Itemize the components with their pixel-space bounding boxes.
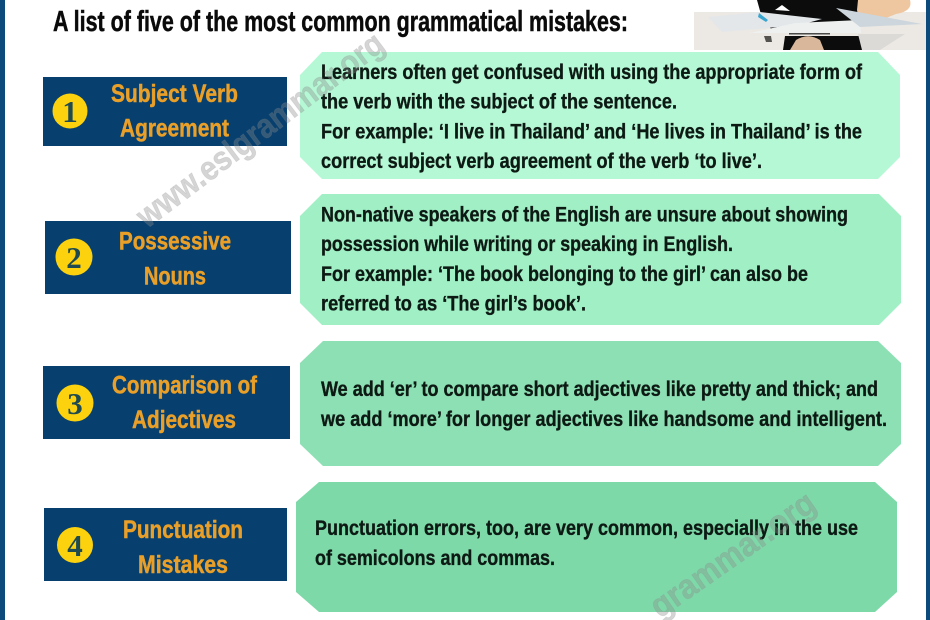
label: comparison of adjectives: Adjectives [132, 406, 236, 434]
photo: student writing at a desk [694, 0, 926, 50]
right border strip [926, 0, 930, 620]
label: possessive nouns: Nouns [144, 262, 206, 290]
title: A list of five of the most common grammatical mistakes: [53, 6, 628, 38]
panel: mistake 1 description [300, 52, 900, 179]
panel: mistake 4 description: Punctuation errors, too, are very common, especially in the use [315, 517, 858, 540]
label: punctuation mistakes [44, 508, 287, 581]
label: subject verb agreement [43, 77, 287, 146]
panel: mistake 1 description: the verb with the subject of the sentence. [321, 90, 677, 114]
label: punctuation mistakes: Mistakes [138, 551, 228, 579]
label: possessive nouns [45, 221, 291, 294]
label: possessive nouns: 2 [66, 240, 82, 275]
panel: mistake 2 description: possession while writing or speaking in English. [321, 233, 733, 256]
panel: mistake 4 description [296, 482, 897, 612]
panel: mistake 2 description: For example: ‘The book belonging to the girl’ can also be [321, 263, 808, 286]
label: comparison of adjectives [43, 366, 290, 439]
label: possessive nouns: Possessive [119, 228, 231, 256]
panel: mistake 2 description: Non-native speakers of the English are unsure about showing [321, 204, 848, 226]
label: subject verb agreement: Subject Verb [111, 80, 238, 108]
watermark: upper left: www.eslgrammar.org [128, 24, 391, 236]
panel: mistake 2 description [300, 194, 901, 325]
label: subject verb agreement: Agreement [120, 114, 230, 142]
panel: mistake 2 description: referred to as ‘The girl’s book’. [321, 292, 586, 316]
label: subject verb agreement: 1 [62, 94, 78, 129]
label: punctuation mistakes: Punctuation [123, 516, 243, 544]
panel: mistake 1 description: correct subject verb agreement of the verb ‘to live’. [321, 150, 762, 173]
panel: mistake 3 description [300, 341, 901, 466]
left border strip [0, 0, 5, 620]
label: comparison of adjectives: 3 [67, 386, 83, 421]
panel: mistake 4 description: of semicolons and commas. [315, 547, 555, 570]
label: comparison of adjectives: Comparison of [112, 372, 258, 400]
panel: mistake 1 description: For example: ‘I live in Thailand’ and ‘He lives in Thailand’ is the [321, 120, 862, 144]
label: punctuation mistakes: 4 [67, 528, 83, 563]
